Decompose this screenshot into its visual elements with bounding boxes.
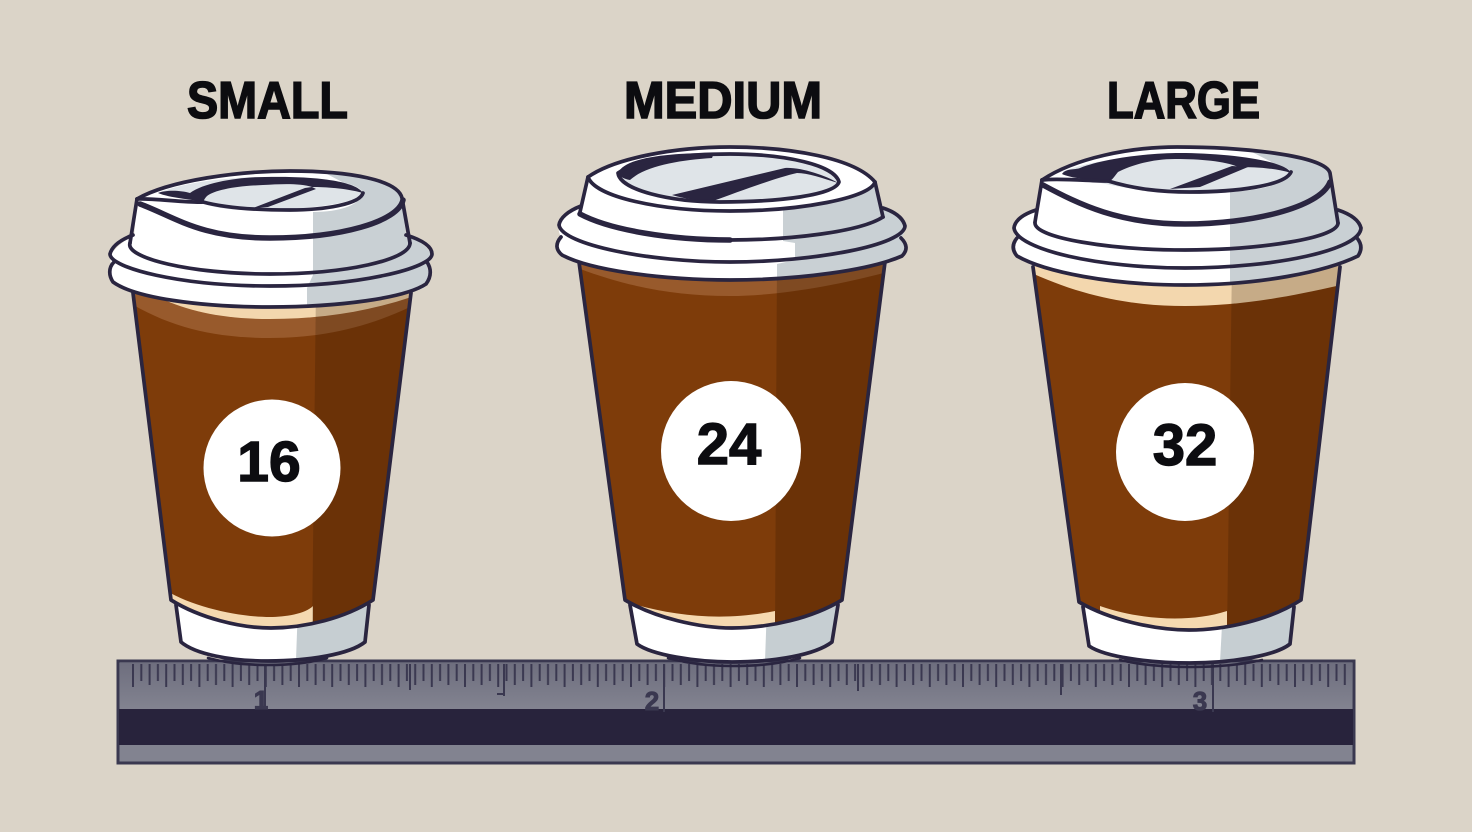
medium cup lid [557, 147, 906, 280]
large cup [1013, 147, 1361, 667]
ruler number 3: 3 [1193, 686, 1207, 716]
small cup [110, 171, 432, 665]
ruler number 1: 1 [254, 685, 268, 715]
large cup base [1083, 607, 1294, 667]
small cup body [125, 285, 420, 635]
heading: large: LARGE [1107, 72, 1260, 130]
heading: medium: MEDIUM [624, 72, 822, 130]
medium size badge: 24 [697, 412, 761, 477]
heading: small: SMALL [187, 72, 348, 130]
medium cup [557, 147, 906, 666]
ruler [118, 661, 1354, 763]
small size badge [204, 400, 340, 536]
large size badge: 32 [1153, 413, 1217, 478]
ruler number 2: 2 [645, 686, 659, 716]
small cup lid [110, 171, 432, 307]
large cup body [1025, 260, 1350, 635]
small cup base [176, 605, 369, 665]
small size badge: 16 [237, 430, 301, 494]
large cup lid [1013, 147, 1361, 285]
medium cup base [630, 605, 838, 666]
large size badge [1116, 383, 1254, 521]
medium size badge [661, 381, 801, 521]
medium cup body [570, 255, 895, 635]
